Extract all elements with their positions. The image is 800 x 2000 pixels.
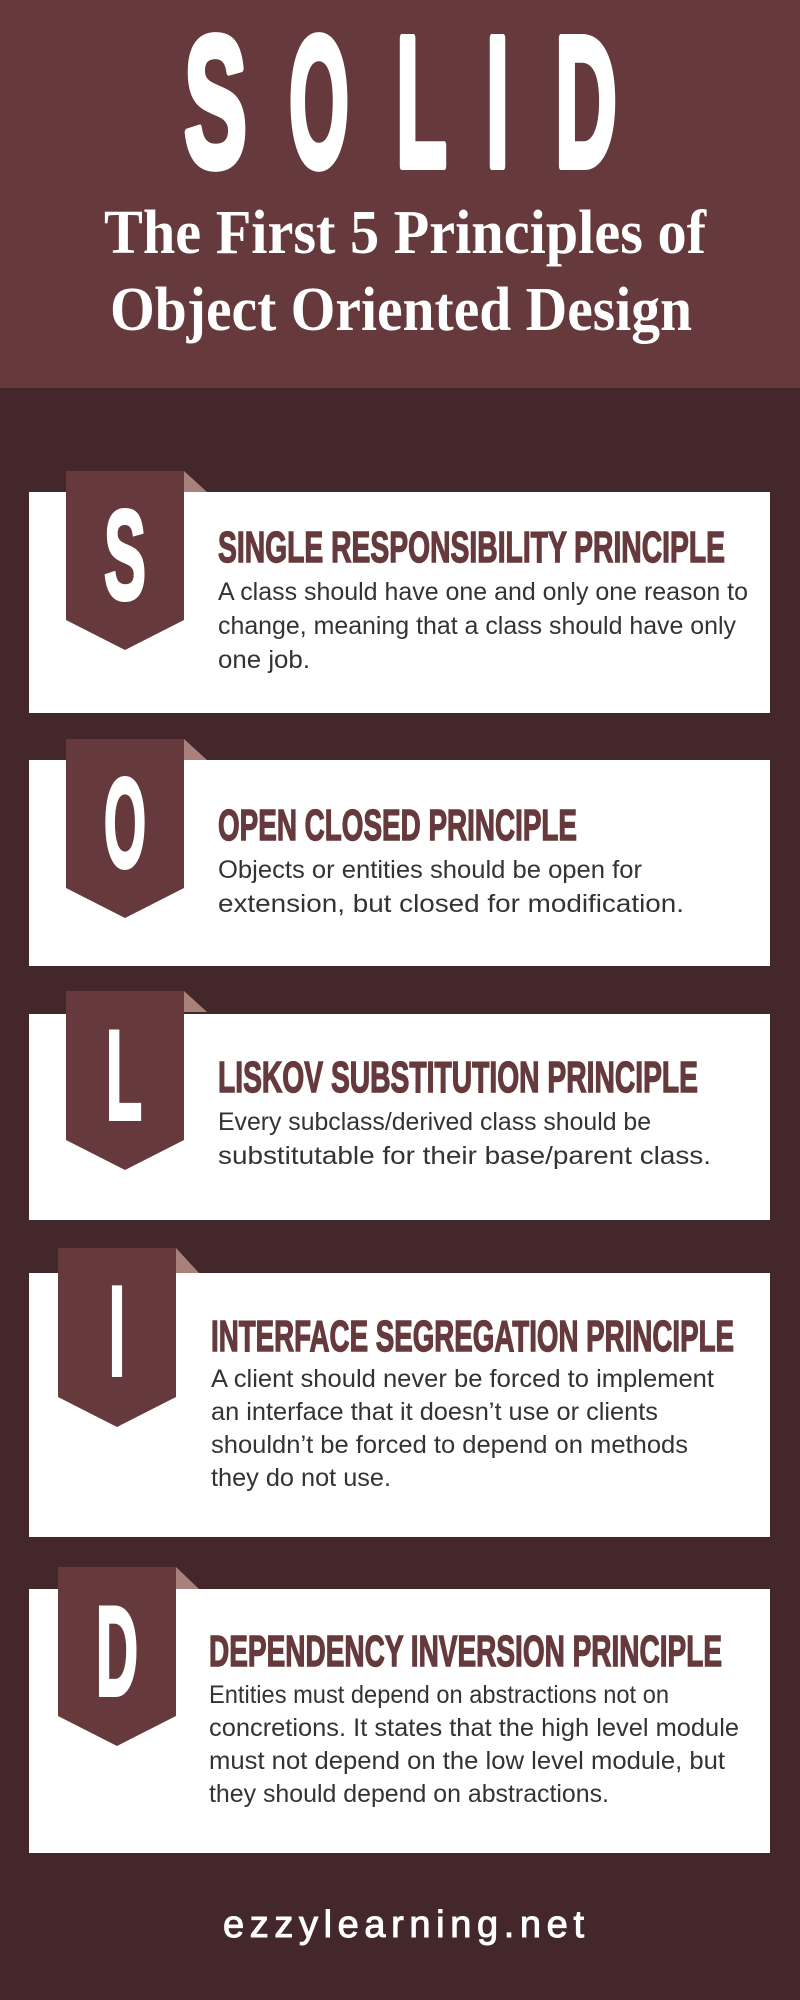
icon: badge L	[66, 991, 207, 1170]
heading: OPEN CLOSED PRINCIPLE	[218, 801, 577, 850]
icon: badge S: S	[104, 484, 146, 626]
panel: dependency inversion	[29, 1567, 770, 1853]
icon: badge I: I	[109, 1260, 125, 1402]
body text: one job.	[218, 646, 310, 674]
panel: liskov substitution	[29, 991, 770, 1220]
body text: Every subclass/derived class should be	[218, 1108, 651, 1136]
title: SOLID: I	[486, 0, 509, 206]
panel: single responsibility	[29, 471, 770, 713]
body text: Entities must depend on abstractions not on	[209, 1681, 669, 1709]
body text: Objects or entities should be open for	[218, 856, 642, 884]
body text: must not depend on the low level module, but	[209, 1747, 725, 1775]
title: SOLID: S	[184, 0, 247, 206]
subtitle	[104, 199, 707, 344]
body text	[211, 1365, 714, 1492]
body text: change, meaning that a class should have only	[218, 612, 736, 640]
body text: A class should have one and only one reason to	[218, 578, 748, 606]
body text: A client should never be forced to implement	[211, 1365, 714, 1393]
icon: badge O: O	[104, 752, 146, 894]
title: SOLID: O	[289, 0, 349, 206]
icon: badge O	[66, 739, 207, 918]
panel: open closed	[29, 739, 770, 966]
body text	[209, 1681, 739, 1808]
body text: concretions. It states that the high level module	[209, 1714, 739, 1742]
body text	[218, 856, 684, 918]
icon: badge D	[58, 1567, 199, 1746]
body text	[218, 578, 748, 674]
header panel: D	[555, 0, 617, 206]
body text: they do not use.	[211, 1464, 391, 1492]
icon: badge I	[58, 1248, 199, 1427]
body text	[218, 1108, 711, 1170]
icon: badge L: L	[106, 1004, 142, 1146]
subtitle: Object Oriented Design	[110, 276, 692, 344]
title: SOLID: L	[396, 0, 447, 206]
icon: badge D: D	[96, 1580, 138, 1722]
icon: badge S	[66, 471, 207, 650]
body text: they should depend on abstractions.	[209, 1780, 609, 1808]
body text: substitutable for their base/parent class.	[218, 1142, 711, 1170]
footer: website: ezzylearning.net	[223, 1904, 584, 1946]
body text: an interface that it doesn’t use or clients	[211, 1398, 658, 1426]
title: SOLID	[184, 0, 617, 206]
body text: shouldn’t be forced to depend on methods	[211, 1431, 688, 1459]
header panel	[0, 0, 800, 388]
panel: interface segregation	[29, 1248, 770, 1537]
subtitle: The First 5 Principles of	[104, 199, 707, 267]
body text: extension, but closed for modification.	[218, 890, 684, 918]
